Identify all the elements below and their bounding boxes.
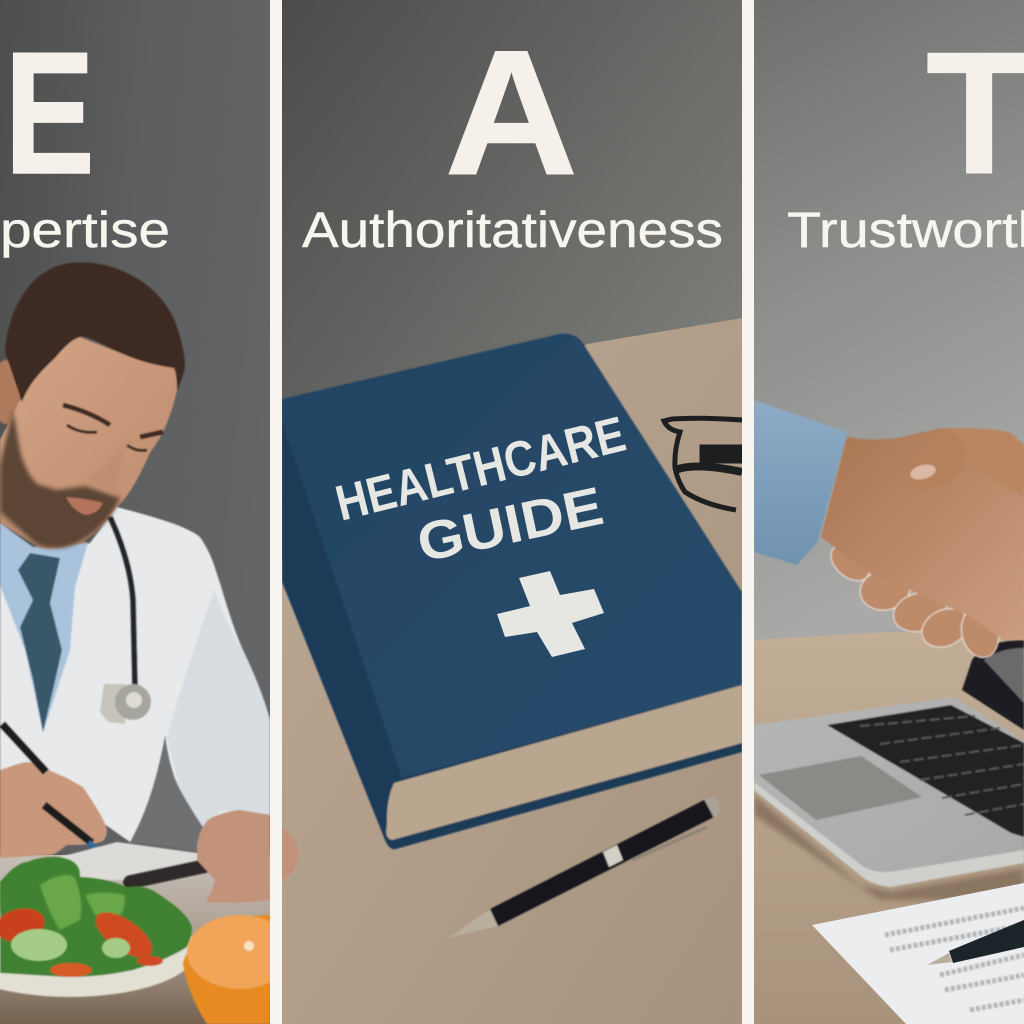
HEALTHCARE: HEALTHCARE: [330, 406, 631, 532]
laptop base: [754, 697, 1024, 887]
icon: medical cross: [497, 571, 604, 657]
lips: [66, 497, 103, 515]
doctor figure: [0, 262, 270, 903]
book title: [336, 416, 627, 558]
spine shade: [282, 423, 402, 782]
hand edge from first panel: [282, 827, 299, 882]
back cover and spine: [282, 415, 742, 849]
laptop edge shadow: [754, 795, 1024, 900]
second pen: [130, 864, 214, 882]
hair: [5, 262, 185, 402]
glasses: [664, 418, 742, 510]
upper hand fingers: [941, 428, 1024, 510]
panel: Trustworthiness: [754, 0, 1024, 1024]
orange: [182, 914, 270, 1024]
word: Authoritativeness: Authoritativeness: [302, 202, 723, 258]
laptop screen: [962, 640, 1024, 730]
coat gap: [130, 735, 205, 851]
tie: [18, 553, 62, 732]
pen: [449, 798, 720, 938]
writing hand: [0, 762, 107, 858]
eyes and brows: [63, 405, 163, 437]
table surface: [0, 855, 270, 1024]
lower fingers: [824, 538, 1004, 662]
table: [282, 318, 742, 1024]
shirt cuff: [754, 400, 847, 565]
thumbnail: [909, 462, 937, 482]
letter A: A: [444, 14, 578, 212]
nose shading: [112, 445, 128, 494]
paper: [60, 842, 197, 880]
front edge: [754, 782, 1024, 887]
handshake: [754, 400, 1024, 662]
table: [754, 632, 1024, 1024]
back of hand and wrist: [821, 428, 1024, 640]
neck: [0, 513, 88, 547]
shirt: [0, 523, 88, 733]
GUIDE: GUIDE: [412, 476, 608, 574]
pen in hand: [2, 724, 92, 843]
thumb: [911, 430, 967, 491]
cover: [282, 334, 742, 778]
salad plate: [0, 857, 197, 997]
face: [0, 337, 178, 549]
stethoscope chest piece: [100, 684, 151, 724]
page block: [386, 685, 742, 840]
beard: [0, 410, 120, 548]
white coat: [0, 506, 244, 842]
panel: Expertise: [0, 0, 293, 1024]
ear: [0, 360, 20, 424]
keyboard: [827, 705, 1024, 837]
laptop: [754, 640, 1024, 900]
sleeve: [167, 590, 270, 827]
panel: Authoritativeness: [282, 0, 742, 1024]
letter E: E: [4, 17, 95, 211]
pen tip: [87, 840, 99, 850]
right hand: [197, 810, 270, 903]
trackpad: [759, 756, 922, 820]
paper and pen: [812, 883, 1024, 1024]
stethoscope tube: [110, 517, 135, 690]
book: [282, 334, 742, 849]
